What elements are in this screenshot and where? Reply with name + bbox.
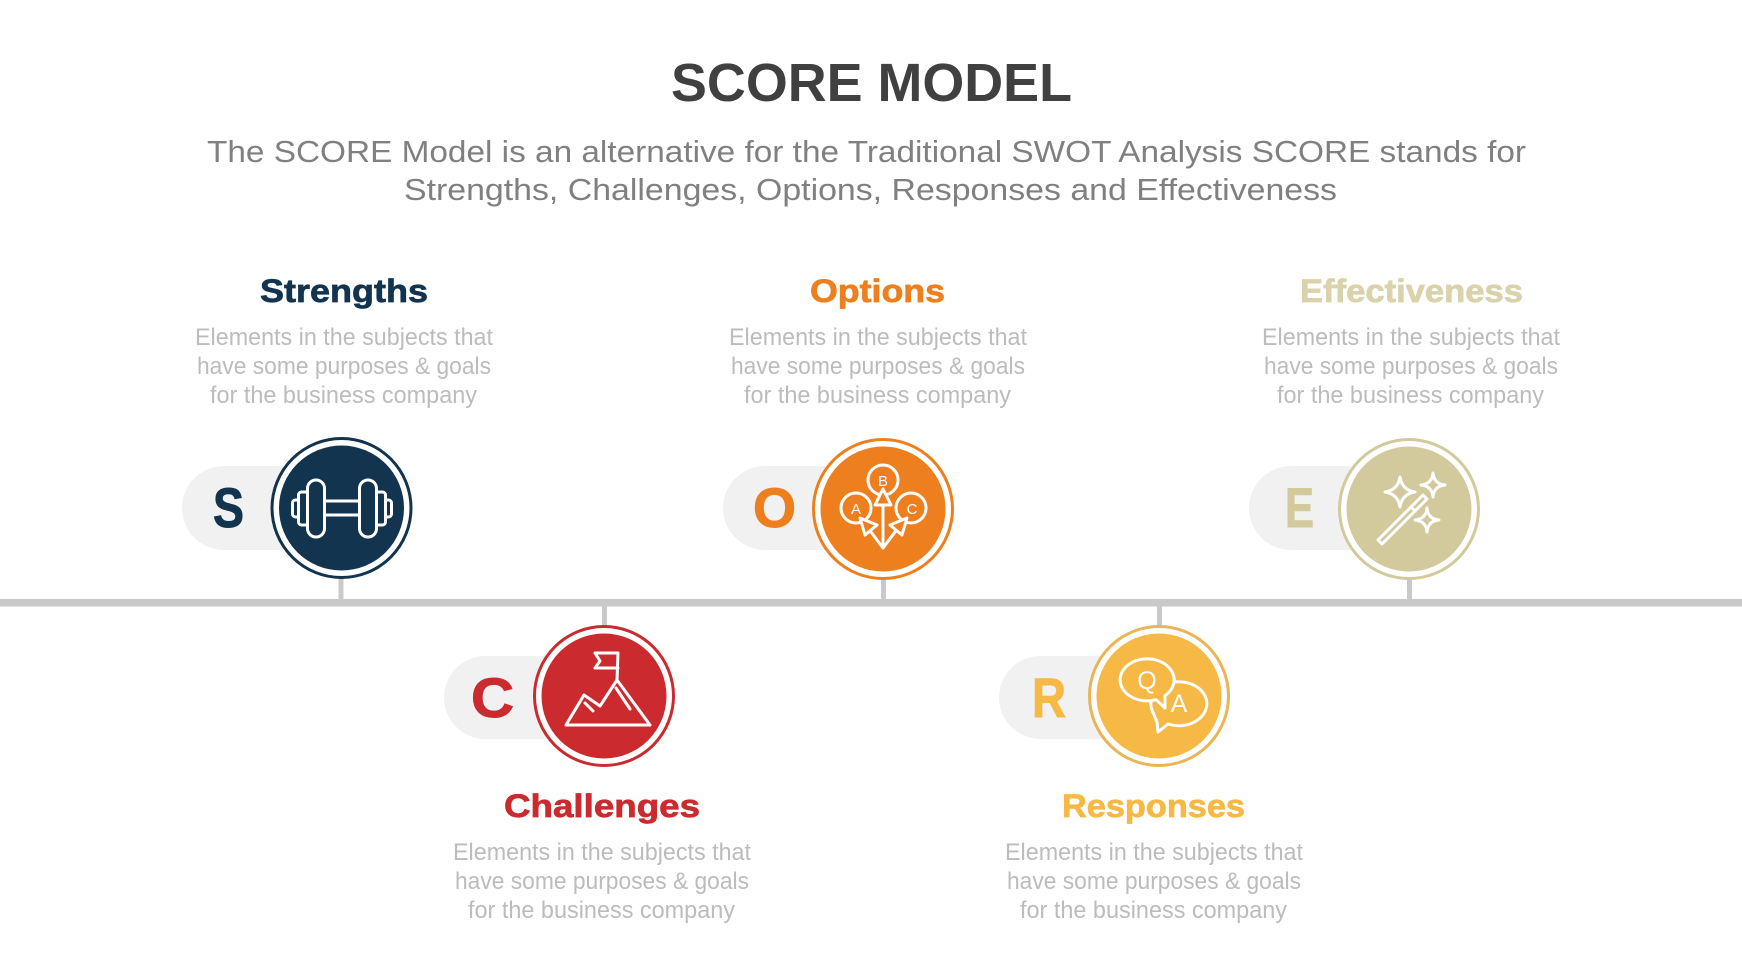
timeline xyxy=(0,575,1742,628)
heading: options: Options xyxy=(810,273,945,309)
description: responses: for the business company xyxy=(1020,897,1287,924)
description: responses: have some purposes & goals xyxy=(1007,868,1301,895)
icon: choice arrows: A xyxy=(851,501,861,518)
description: strengths xyxy=(195,324,493,409)
heading: challenges: Challenges xyxy=(504,788,700,824)
title: SCORE MODEL xyxy=(671,53,1072,113)
panel: effectiveness xyxy=(1249,273,1560,578)
icon: choice arrows: C xyxy=(907,501,918,518)
letter pill: C: C xyxy=(471,666,514,729)
letter pill: C xyxy=(444,656,604,739)
description: strengths: for the business company xyxy=(210,382,477,409)
letter pill: E: E xyxy=(1285,476,1314,539)
letter pill: O: O xyxy=(753,476,796,539)
icon: choice arrows: B xyxy=(878,473,888,490)
description: challenges: for the business company xyxy=(468,897,735,924)
description: challenges: Elements in the subjects that xyxy=(453,839,751,866)
icon: Q and A speech bubbles xyxy=(1090,626,1228,766)
panel: options xyxy=(723,273,1027,578)
description: effectiveness: for the business company xyxy=(1277,382,1544,409)
heading: responses: Responses xyxy=(1062,788,1245,824)
panel: challenges xyxy=(444,626,751,924)
letter pill: R: R xyxy=(1032,666,1066,729)
letter pill: S: S xyxy=(213,476,244,539)
description: options xyxy=(729,324,1027,409)
description: strengths: Elements in the subjects that xyxy=(195,324,493,351)
icon: mountain flag xyxy=(534,626,674,766)
subtitle: Strengths, Challenges, Options, Responses and Effectiveness xyxy=(404,172,1337,207)
panel: responses xyxy=(999,626,1303,924)
description: options: have some purposes & goals xyxy=(731,353,1025,380)
description: effectiveness: have some purposes & goals xyxy=(1264,353,1558,380)
description: challenges: have some purposes & goals xyxy=(455,868,749,895)
description: options: for the business company xyxy=(744,382,1011,409)
description: responses: Elements in the subjects that xyxy=(1005,839,1303,866)
icon: Q and A speech bubbles: Q xyxy=(1137,667,1157,695)
icon: choice arrows xyxy=(814,440,952,578)
heading: strengths: Strengths xyxy=(260,273,428,309)
heading: effectiveness: Effectiveness xyxy=(1300,273,1523,309)
letter pill: O xyxy=(723,466,883,550)
description: effectiveness xyxy=(1262,324,1560,409)
description: effectiveness: Elements in the subjects that xyxy=(1262,324,1560,351)
icon: magic wand xyxy=(1340,440,1478,578)
panel: strengths xyxy=(182,273,493,578)
subtitle xyxy=(207,134,1526,207)
icon: Q and A speech bubbles: A xyxy=(1171,690,1188,718)
letter pill: R xyxy=(999,656,1159,739)
description: strengths: have some purposes & goals xyxy=(197,353,491,380)
description: options: Elements in the subjects that xyxy=(729,324,1027,351)
description: challenges xyxy=(453,839,751,924)
icon: dumbbell xyxy=(272,438,411,578)
subtitle: The SCORE Model is an alternative for the Traditional SWOT Analysis SCORE stands for xyxy=(207,134,1526,169)
letter pill: S xyxy=(182,466,342,550)
letter pill: E xyxy=(1249,466,1409,550)
description: responses xyxy=(1005,839,1303,924)
